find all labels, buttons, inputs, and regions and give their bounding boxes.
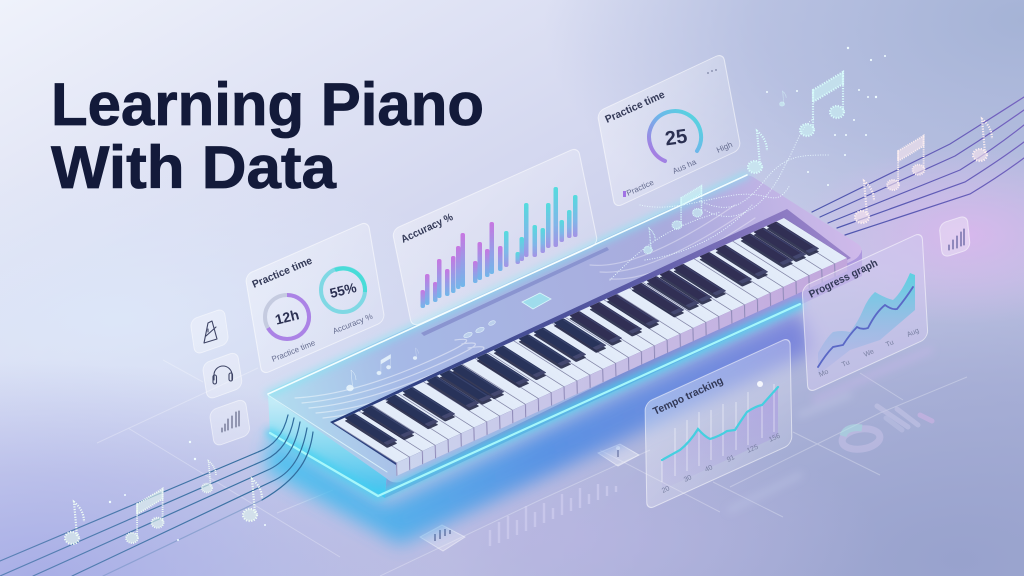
panel: tempo tracking — [645, 337, 792, 510]
back edge glow — [268, 175, 747, 394]
neon line — [268, 304, 800, 496]
axis labels: 125 — [746, 444, 760, 455]
body long front lip — [385, 250, 862, 498]
axis labels: 30 — [683, 474, 693, 484]
keybed recess — [330, 209, 851, 465]
label: center: Aus ha — [671, 157, 698, 176]
caption: accuracy: Accuracy % — [331, 312, 374, 336]
panel: progress graph — [802, 232, 928, 393]
floor ghost equalizer — [490, 484, 616, 546]
left staff lines — [0, 415, 313, 576]
value 12h: 12h — [273, 306, 301, 328]
panel: practice time dial — [597, 53, 741, 208]
title: With Data — [51, 134, 337, 201]
axis labels — [818, 327, 920, 379]
axis labels: Tu — [885, 339, 895, 349]
bar chart — [420, 222, 502, 308]
axis labels: 91 — [726, 454, 736, 464]
floor tile: joystick — [598, 444, 639, 466]
engraved staff on body — [295, 205, 755, 418]
music notes: pink sparkle — [855, 119, 992, 223]
floor glow streaks — [730, 350, 930, 510]
axis labels: 156 — [768, 433, 782, 444]
icon tile: bars — [209, 398, 251, 447]
black key shadows — [344, 224, 819, 448]
heading: Practice time — [603, 89, 667, 126]
engraved notes on body — [346, 348, 418, 391]
axis labels: 40 — [704, 464, 714, 474]
dial arc — [649, 111, 701, 161]
ring: 55% — [321, 268, 365, 312]
black keys: right section — [569, 221, 819, 343]
heading: Practice time — [250, 255, 314, 291]
music notes: cyan sparkle — [644, 72, 844, 254]
window dots — [707, 69, 717, 74]
value 55%: 55% — [328, 280, 358, 301]
title: Learning Piano — [51, 71, 484, 138]
icon tile: right bars — [939, 215, 970, 258]
floor grid lines — [97, 360, 967, 576]
caption: practice time: Practice time — [270, 338, 317, 364]
floor tile: mini chart — [420, 525, 465, 551]
axis labels: Aug — [906, 327, 920, 339]
heading: Progress graph — [807, 257, 880, 301]
marker — [757, 381, 763, 387]
axis labels: We — [863, 348, 875, 359]
area and line chart — [818, 273, 915, 375]
sparkle dots — [109, 47, 886, 541]
legend swatch — [623, 191, 626, 197]
line chart — [662, 384, 778, 490]
floor ghost bars — [877, 406, 932, 430]
icon tile: metronome — [190, 308, 229, 355]
axis labels — [661, 433, 782, 495]
panel: practice time gauges — [245, 221, 385, 375]
axis labels: 20 — [661, 485, 671, 495]
white key fronts — [396, 258, 847, 476]
floor ghost donut — [841, 426, 881, 452]
panel: accuracy bars — [392, 147, 598, 327]
label: high: High — [715, 140, 734, 155]
icon tile: headphones — [202, 351, 243, 400]
right staff lines — [812, 97, 1024, 235]
black keys: left section — [344, 318, 606, 445]
music notes: lower left sparkle — [65, 461, 262, 544]
axis labels: Tu — [841, 359, 851, 369]
flowing dotted music trails — [610, 118, 830, 280]
under-body blue glow — [265, 310, 815, 545]
control buttons — [463, 320, 496, 339]
white keys — [333, 218, 847, 463]
heading: Tempo tracking — [651, 375, 725, 418]
piano keyboard — [265, 175, 862, 545]
dial value: 25 — [664, 126, 689, 150]
music stand slat — [421, 247, 609, 336]
title — [51, 71, 484, 201]
body left face — [268, 395, 387, 498]
body top surface — [268, 175, 862, 482]
axis labels: Mo — [818, 368, 830, 379]
heading: Accuracy % — [399, 211, 456, 246]
legend label: Practice — [625, 178, 656, 198]
control pill — [522, 293, 551, 309]
ring: 12h — [265, 295, 309, 339]
